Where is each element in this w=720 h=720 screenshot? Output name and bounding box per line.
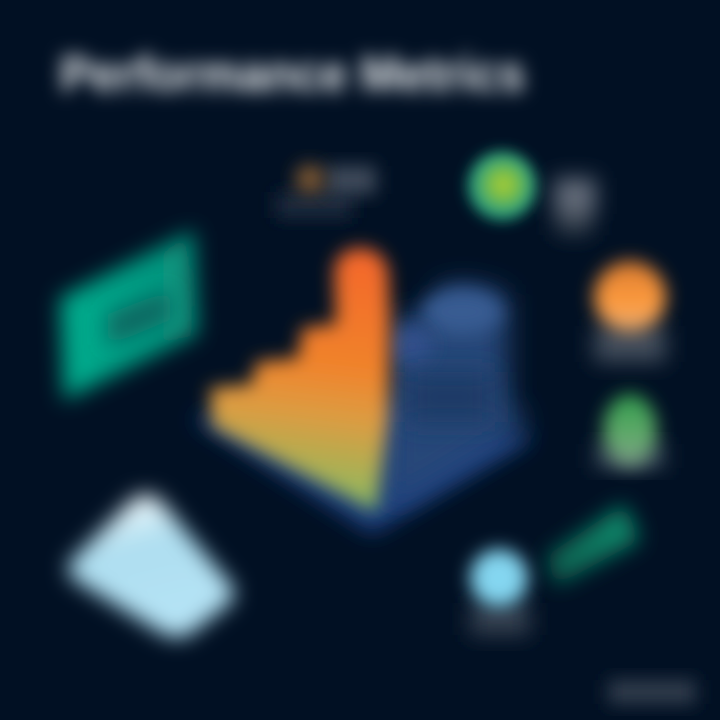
- footer logo: [608, 680, 696, 704]
- text block: orange label: [594, 326, 666, 362]
- icon: legend dot: [295, 164, 325, 194]
- blue shade centre: [405, 372, 495, 422]
- text block: card label: [108, 290, 170, 346]
- panel: ice card: [68, 494, 234, 638]
- arrow: green connector: [546, 504, 640, 586]
- orange staircase: [210, 248, 390, 512]
- legend shadow text: [276, 192, 352, 218]
- blue highlight top: [422, 290, 502, 334]
- icon: green marker: [603, 394, 657, 466]
- legend label: [326, 166, 376, 194]
- chart base: [192, 400, 534, 534]
- icon: orange circle: [594, 261, 666, 333]
- blue bar side: [388, 284, 528, 508]
- card body: [60, 230, 198, 400]
- panel: top legend label: [276, 164, 376, 218]
- title: Performance Metrics: [60, 46, 525, 102]
- blue highlight left: [392, 326, 432, 366]
- icon: green circle badge: [467, 151, 537, 221]
- text block: green badge label: [554, 178, 596, 234]
- icon: light blue circle: [470, 549, 528, 607]
- chart: 3D stepped bars: [192, 248, 534, 534]
- text block: green marker label: [596, 444, 664, 468]
- text block: light blue label: [470, 603, 530, 635]
- panel: green card: [60, 230, 198, 400]
